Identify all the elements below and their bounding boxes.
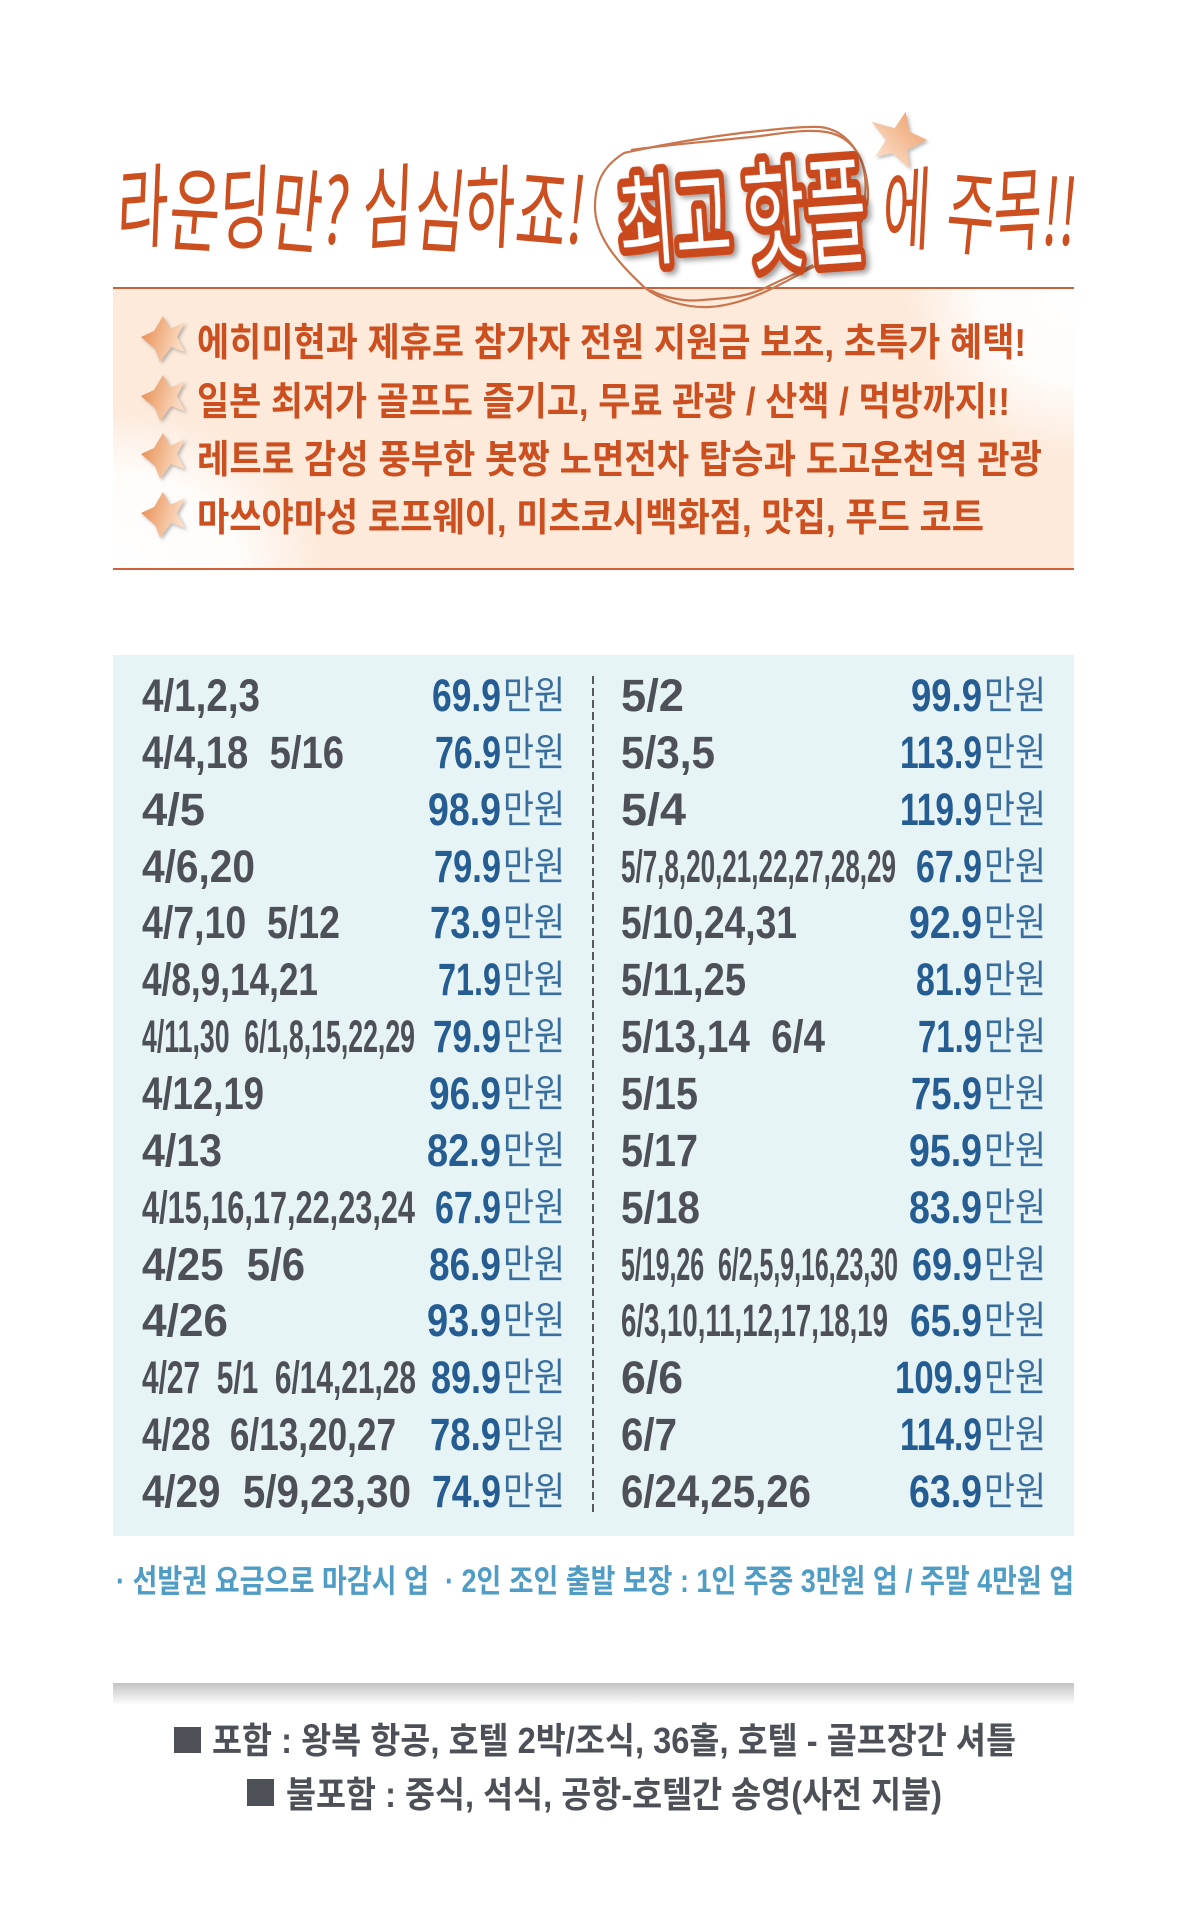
right column prices: 만원 [984, 1120, 1046, 1176]
right column dates: 5/7,8,20,21,22,27,28,29 [621, 841, 896, 892]
bullet 3: 레트로 감성 풍부한 봇짱 노면전차 탑승과 도고온천역 관광 [197, 439, 1042, 482]
title [108, 134, 1085, 274]
left column prices: 93.9 [427, 1295, 501, 1346]
pricing notes: · 선발권 요금으로 마감시 업 [116, 1563, 429, 1599]
left column dates: 4/12,19 [142, 1068, 264, 1119]
right column prices: 만원 [984, 1063, 1046, 1119]
left column prices: 만원 [503, 892, 565, 948]
right column prices: 만원 [984, 836, 1046, 892]
right column prices: 만원 [984, 949, 1046, 1005]
right column dates: 5/2 [621, 670, 684, 721]
right column dates [621, 670, 898, 1517]
right column dates: 5/13,14 6/4 [621, 1011, 825, 1062]
left column prices: 만원 [503, 1347, 565, 1403]
right column dates: 5/17 [621, 1125, 698, 1176]
hand drawn circle highlight [595, 127, 868, 307]
right column prices: 119.9 [900, 784, 982, 835]
divider band [113, 1683, 1074, 1705]
right column prices: 109.9 [895, 1352, 982, 1403]
left column dates: 4/11,30 6/1,8,15,22,29 [142, 1011, 415, 1062]
left column prices: 86.9 [429, 1239, 501, 1290]
right column dates: 5/19,26 6/2,5,9,16,23,30 [621, 1239, 898, 1290]
highlighted words: 최고 핫플 [612, 116, 872, 304]
right column prices: 만원 [984, 1404, 1046, 1460]
right column prices: 99.9 [911, 670, 982, 721]
title text: left part: 라운딩만? 심심하죠! [108, 134, 597, 273]
left column prices: 만원 [503, 836, 565, 892]
bullet 1: 에히미현과 제휴로 참가자 전원 지원금 보조, 초특가 혜택! [197, 322, 1026, 365]
left column dates: 4/26 [142, 1295, 228, 1346]
left column prices: 만원 [503, 1290, 565, 1346]
right column dates: 5/4 [621, 784, 686, 835]
left column prices [427, 665, 565, 1517]
left column dates: 4/29 5/9,23,30 [142, 1466, 411, 1517]
right column prices: 만원 [984, 1234, 1046, 1290]
left column prices: 69.9 [432, 670, 501, 721]
right column prices: 113.9 [900, 727, 982, 778]
price table [113, 655, 1074, 1536]
right column prices: 67.9 [916, 841, 982, 892]
right column dates: 6/24,25,26 [621, 1466, 811, 1517]
right column prices: 95.9 [909, 1125, 982, 1176]
right column prices: 83.9 [909, 1182, 982, 1233]
right column dates: 5/3,5 [621, 727, 715, 778]
right column dates: 5/15 [621, 1068, 698, 1119]
left column dates: 4/7,10 5/12 [142, 897, 340, 948]
column divider [592, 676, 594, 1515]
pricing notes: · 2인 조인 출발 보장 : 1인 주중 3만원 업 / 주말 4만원 업 [445, 1563, 1074, 1599]
bullet 4: 마쓰야마성 로프웨이, 미츠코시백화점, 맛집, 푸드 코트 [197, 497, 984, 540]
left column prices: 98.9 [428, 784, 501, 835]
right column prices: 71.9 [918, 1011, 982, 1062]
left column dates: 4/28 6/13,20,27 [142, 1409, 396, 1460]
highlighted words: 최고 핫플: 최고 [613, 135, 735, 287]
right column prices: 만원 [984, 1177, 1046, 1233]
left column prices: 76.9 [435, 727, 501, 778]
right column prices: 65.9 [910, 1295, 982, 1346]
left column dates: 4/8,9,14,21 [142, 954, 318, 1005]
left column dates: 4/6,20 [142, 841, 255, 892]
left column prices: 만원 [503, 949, 565, 1005]
right column prices [895, 665, 1046, 1517]
left column prices: 89.9 [431, 1352, 501, 1403]
right column prices: 만원 [984, 1347, 1046, 1403]
right column prices: 75.9 [911, 1068, 982, 1119]
left column prices: 67.9 [435, 1182, 501, 1233]
right column prices: 63.9 [909, 1466, 982, 1517]
left column prices: 만원 [503, 1177, 565, 1233]
right column dates: 5/10,24,31 [621, 897, 797, 948]
left column prices: 73.9 [430, 897, 501, 948]
left column dates: 4/15,16,17,22,23,24 [142, 1182, 415, 1233]
left column prices: 만원 [503, 1063, 565, 1119]
bullet 2: 일본 최저가 골프도 즐기고, 무료 관광 / 산책 / 먹방까지!! [197, 381, 1010, 424]
right column prices: 92.9 [909, 897, 982, 948]
right column prices: 만원 [984, 1461, 1046, 1517]
left column prices: 96.9 [429, 1068, 501, 1119]
left column dates: 4/13 [142, 1125, 222, 1176]
left column dates: 4/4,18 5/16 [142, 727, 344, 778]
right column dates: 5/11,25 [621, 954, 746, 1005]
left column dates: 4/27 5/1 6/14,21,28 [142, 1352, 416, 1403]
table background [113, 655, 1074, 1536]
right column dates: 6/3,10,11,12,17,18,19 [621, 1295, 888, 1346]
left column dates: 4/5 [142, 784, 205, 835]
title text: right part: 에 주목!! [875, 137, 1085, 274]
bullet list [141, 316, 1042, 540]
highlighted words: 최고 핫플: 핫플 [738, 116, 872, 296]
right column prices: 만원 [984, 722, 1046, 778]
right column prices: 만원 [984, 665, 1046, 721]
right column prices: 만원 [984, 1006, 1046, 1062]
left column prices: 74.9 [432, 1466, 501, 1517]
excluded items: 불포함 : 중식, 석식, 공항-호텔간 송영(사전 지불) [286, 1774, 942, 1815]
left column dates [142, 670, 416, 1517]
left column prices: 만원 [503, 779, 565, 835]
right column prices: 만원 [984, 779, 1046, 835]
left column prices: 79.9 [434, 841, 501, 892]
left column prices: 만원 [503, 1234, 565, 1290]
panel: highlights background [113, 287, 1074, 570]
icon: large star [872, 112, 927, 168]
left column prices: 만원 [503, 722, 565, 778]
left column prices: 71.9 [438, 954, 501, 1005]
left column prices: 만원 [503, 665, 565, 721]
left column dates: 4/1,2,3 [142, 670, 260, 721]
left column prices: 79.9 [433, 1011, 501, 1062]
right column dates: 6/7 [621, 1409, 677, 1460]
left column prices: 82.9 [427, 1125, 501, 1176]
left column prices: 만원 [503, 1006, 565, 1062]
left column prices: 만원 [503, 1404, 565, 1460]
pricing notes [116, 1563, 1074, 1599]
right column prices: 69.9 [912, 1239, 982, 1290]
right column dates: 5/18 [621, 1182, 700, 1233]
left column dates: 4/25 5/6 [142, 1239, 305, 1290]
right column prices: 만원 [984, 892, 1046, 948]
right column prices: 114.9 [900, 1409, 982, 1460]
right column dates: 6/6 [621, 1352, 683, 1403]
left column prices: 만원 [503, 1120, 565, 1176]
right column prices: 만원 [984, 1290, 1046, 1346]
left column prices: 78.9 [430, 1409, 501, 1460]
included items: 포함 : 왕복 항공, 호텔 2박/조식, 36홀, 호텔 - 골프장간 셔틀 [212, 1720, 1016, 1761]
right column prices: 81.9 [916, 954, 982, 1005]
left column prices: 만원 [503, 1461, 565, 1517]
